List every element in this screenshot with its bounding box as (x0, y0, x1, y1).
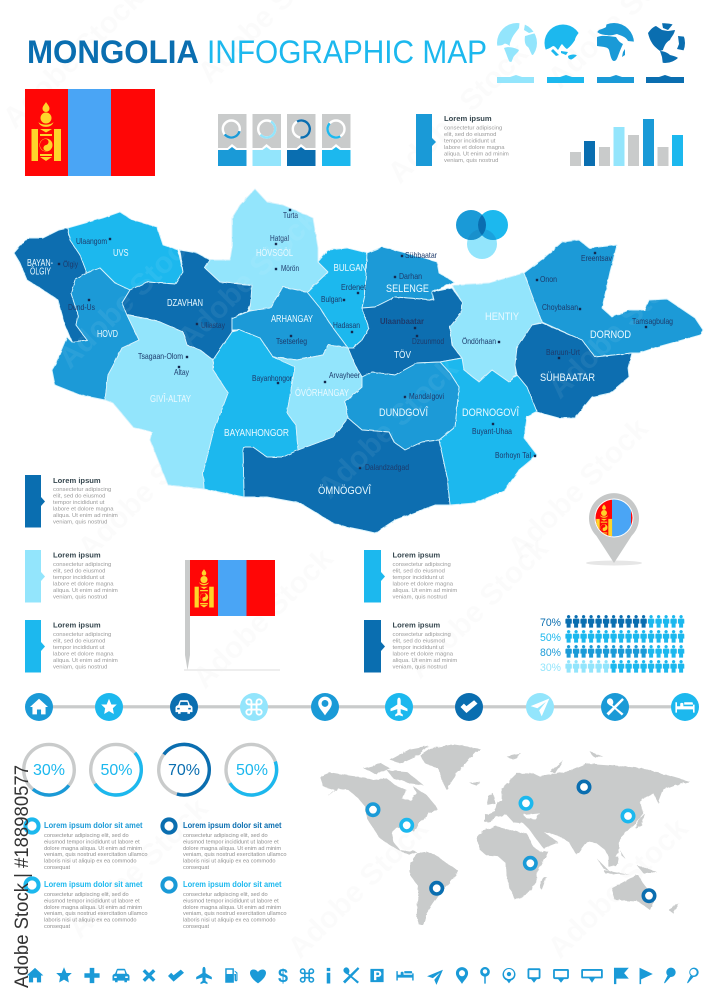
donut 50 percent (80, 734, 152, 805)
city labels: Ulaanbaatar (380, 316, 425, 326)
text block 2: veniam, quis nostrud exercitation ullamco (183, 852, 286, 858)
icon: map pin (311, 693, 339, 721)
region: Dundgovi (345, 362, 459, 450)
city labels: Tsagaan-Olom (138, 351, 183, 361)
globe: africa mid (597, 23, 634, 61)
city labels: Dund-Us (68, 302, 95, 312)
icon: command small (301, 969, 313, 982)
text block 1: dolore magna aliqua. Ut enim ad minim (44, 846, 142, 852)
icon: home outline (27, 968, 43, 982)
region: Suhbaatar (515, 323, 632, 418)
city labels: Buyant-Uhaa (472, 426, 512, 436)
legend block 2: labore et dolore magna (53, 582, 114, 588)
legend block 4: consectetur adipiscing (392, 562, 451, 568)
region labels: GIVÎ-ALTAY (150, 392, 191, 405)
legend block 2 (25, 550, 118, 602)
legend block 1: elit, sed do eiusmod (53, 494, 105, 500)
legend block 4: veniam, quis nostrud (392, 594, 447, 600)
legend block 4: elit, sed do eiusmod (392, 568, 445, 574)
region labels: BAYANHONGOR (224, 428, 289, 439)
city labels: Bayanhongor (252, 373, 292, 383)
text block 3: consectetur adipiscing elit, sed do (44, 892, 129, 898)
text block 2 (162, 819, 286, 871)
globe base bars (497, 75, 684, 83)
region: Arhangay (232, 287, 348, 360)
region: Dornod (524, 240, 703, 357)
legend block 1: aliqua. Ut enim ad minim (53, 513, 118, 519)
text block 4: Lorem ipsum dolor sit amet (183, 880, 282, 889)
legend block 5: aliqua. Ut enim ad minim (392, 658, 457, 664)
donut 50 percent second: 50% (236, 762, 268, 779)
city labels: Tsetserleg (276, 336, 307, 346)
bar chart (570, 119, 683, 166)
city labels: Tamsagbulag (632, 316, 673, 326)
top text block: veniam, quis nostrud (444, 158, 498, 164)
legend block 5: labore et dolore magna (392, 652, 454, 658)
vertical stock credit: Adobe Stock | #188980577 (12, 765, 33, 988)
text block 1: laboris nisi ut aliquip ex ea commodo (44, 858, 136, 864)
title: MONGOLIA (27, 34, 199, 70)
legend block 2: aliqua. Ut enim ad minim (53, 588, 118, 594)
location pin with flag (586, 493, 642, 566)
map markers (367, 781, 655, 901)
watermark over map (52, 202, 695, 505)
city labels: Hadasan (333, 320, 360, 330)
icon: home (25, 693, 53, 721)
icon: wide callout (553, 969, 569, 983)
region labels: ÖVÖRHANGAY (295, 387, 349, 399)
legend block 3 (25, 620, 118, 672)
top text block: labore et dolore magna (444, 145, 505, 151)
globe: asia bright (544, 24, 578, 60)
region: Hentiy (450, 273, 542, 382)
region: Bayanhongor (203, 330, 298, 497)
text block 4: veniam, quis nostrud exercitation ullamco (183, 911, 286, 917)
text block 3: veniam, quis nostrud exercitation ullamco (44, 911, 147, 917)
region: Hovd (52, 268, 139, 400)
text block 1: veniam, quis nostrud exercitation ullamco (44, 852, 147, 858)
city labels (63, 210, 673, 472)
text block 3: eiusmod tempor incididunt ut labore et (44, 898, 140, 904)
icon: fuel pump (225, 968, 237, 983)
icon: square callout (528, 968, 540, 983)
percentage labels: 30% (540, 662, 561, 674)
legend block 5: elit, sed do eiusmod (392, 638, 445, 644)
donut 50 percent: 50% (100, 762, 133, 779)
region labels: HÖVSGÖL (256, 247, 293, 259)
text block 4: consequat (183, 924, 209, 930)
title (27, 34, 487, 70)
watermark over map: Adobe Stock (172, 202, 325, 355)
icon: paper plane small (427, 970, 443, 985)
region: Tov (348, 288, 462, 377)
icon: car small (112, 969, 130, 982)
icon: pin (456, 967, 468, 984)
city labels: Mörön (281, 263, 299, 273)
legend block 3: Lorem ipsum (53, 620, 101, 630)
icon: flag (614, 968, 629, 984)
text block 2: consectetur adipiscing elit, sed do (183, 833, 268, 839)
text block 1 (25, 819, 147, 871)
legend block 5 (364, 620, 457, 672)
icon: command (240, 693, 268, 721)
percentage labels (540, 617, 561, 674)
text block 2: dolore magna aliqua. Ut enim ad minim (183, 846, 281, 852)
city labels: Baruun-Urt (546, 347, 581, 357)
text block 1: Lorem ipsum dolor sit amet (44, 821, 143, 830)
venn diagram (456, 210, 508, 259)
map of Mongolia (14, 189, 703, 533)
text block 4 (162, 878, 286, 930)
icon: star (95, 693, 123, 721)
icon: wider callout (581, 969, 603, 983)
legend block 4: labore et dolore magna (392, 582, 454, 588)
region labels: HOVD (97, 329, 118, 340)
people row 80 percent (565, 645, 684, 658)
icon: bed (671, 693, 699, 721)
legend block 2: veniam, quis nostrud (53, 594, 107, 600)
icon: info (327, 968, 330, 984)
card 3 (287, 114, 316, 166)
city dots (58, 209, 647, 469)
city labels: Ölgiy (63, 259, 79, 269)
icon: push pin (664, 968, 676, 983)
donut 70 percent: 70% (168, 762, 200, 779)
people row 70 percent (565, 615, 684, 628)
icon: magnifier pin (687, 968, 699, 983)
percentage labels: 70% (540, 617, 561, 629)
legend block 3: aliqua. Ut enim ad minim (53, 658, 118, 664)
world map (320, 744, 690, 925)
bottom icon row (27, 966, 699, 986)
legend block 3: veniam, quis nostrud (53, 664, 107, 670)
text block 2: laboris nisi ut aliquip ex ea commodo (183, 858, 276, 864)
city labels: Darhan (399, 271, 422, 281)
icon: pennant (640, 968, 653, 984)
icon: round pin (480, 967, 490, 984)
icon: check small (168, 970, 184, 982)
city labels: Bulgan (321, 294, 342, 304)
icon: star small (56, 967, 72, 982)
region labels: ÖMNÖGOVÎ (318, 484, 372, 497)
region labels: DORNOD (590, 329, 631, 341)
city labels: Dalandzadgad (365, 462, 409, 472)
top text block: aliqua. Ut enim ad minim (444, 152, 509, 158)
icon: parking (370, 969, 384, 982)
region labels: ÖLGIY (30, 266, 51, 278)
top text block: consectetur adipiscing (444, 126, 502, 132)
region: Bayan-Olgiy (14, 228, 87, 342)
text block 3: dolore magna aliqua. Ut enim ad minim (44, 905, 142, 911)
card 4 (322, 114, 350, 166)
donut 50 percent second (220, 738, 283, 801)
legend block 1: Lorem ipsum (53, 476, 101, 485)
flag on pole (184, 560, 280, 671)
globe: americas dark (648, 23, 687, 65)
legend block 3: elit, sed do eiusmod (53, 638, 105, 644)
legend block 5: veniam, quis nostrud (392, 664, 447, 670)
text block 1: consequat (44, 865, 70, 871)
donut 30 percent: 30% (33, 762, 65, 779)
city labels: Borhoyn Tal (495, 450, 531, 460)
legend block 4 (364, 550, 457, 602)
legend block 5: consectetur adipiscing (392, 632, 451, 638)
region labels: DZAVHAN (167, 298, 203, 309)
percentage labels: 50% (540, 632, 561, 644)
legend block 4: tempor incididunt ut (392, 575, 444, 581)
top text block: Lorem ipsum (444, 114, 492, 123)
donut charts (13, 734, 283, 805)
text block 3: Lorem ipsum dolor sit amet (44, 880, 143, 889)
text block 4: dolore magna aliqua. Ut enim ad minim (183, 905, 281, 911)
text block 3: consequat (44, 924, 70, 930)
percentage labels: 80% (540, 647, 561, 659)
flag of Mongolia (25, 89, 155, 176)
text block 4: eiusmod tempor incididunt ut labore et (183, 898, 279, 904)
region labels: BULGAN (334, 263, 366, 274)
legend block 5: Lorem ipsum (392, 620, 440, 630)
legend block 1: tempor incididunt ut (53, 500, 105, 506)
region labels: SÜHBAATAR (540, 372, 595, 384)
icon: bed small (396, 971, 414, 981)
city labels: Ulaangom (76, 236, 107, 246)
card 1 (218, 114, 246, 166)
globes row (497, 23, 685, 83)
region: Omnogovi (243, 418, 450, 533)
city labels: Uliastay (201, 320, 226, 330)
title: INFOGRAPHIC MAP (207, 34, 487, 70)
legend block 1: labore et dolore magna (53, 506, 114, 512)
region labels: ARHANGAY (271, 314, 313, 325)
legend block 4: Lorem ipsum (392, 550, 440, 560)
city labels: Mandalgovi (409, 391, 444, 401)
text block 2: Lorem ipsum dolor sit amet (183, 821, 282, 830)
watermark over map: Adobe Stock (52, 222, 205, 375)
region: Govi-Altay (105, 315, 228, 489)
region labels: BAYAN- (27, 258, 53, 269)
region: Dornogovi (439, 358, 537, 505)
text block 4: laboris nisi ut aliquip ex ea commodo (183, 918, 276, 924)
legend block 1: consectetur adipiscing (53, 487, 111, 493)
watermark over map: Adobe Stock (312, 352, 465, 505)
icon: fork knife small (343, 967, 359, 984)
map regions (14, 189, 703, 533)
region: Ovorhangay (273, 345, 362, 450)
people percentage chart (540, 615, 684, 674)
legend block 3: consectetur adipiscing (53, 632, 111, 638)
region: Bulgan (307, 248, 369, 348)
legend block 5: tempor incididunt ut (392, 645, 444, 651)
city labels: Onon (540, 274, 557, 284)
text block 1: consectetur adipiscing elit, sed do (44, 833, 129, 839)
region labels: TÖV (394, 349, 411, 361)
region labels: UVS (113, 248, 129, 259)
icon: check (455, 693, 483, 721)
city labels: Sühbaatar (405, 250, 437, 260)
icon: heart (250, 969, 266, 983)
legend block 2: Lorem ipsum (53, 550, 101, 560)
text block 4: consectetur adipiscing elit, sed do (183, 892, 268, 898)
city labels: Altay (174, 367, 190, 377)
region: Dzavhan (122, 250, 252, 360)
people row 50 percent (565, 630, 684, 643)
icon: cross (143, 969, 155, 982)
globe: americas light (497, 23, 537, 62)
city labels: Dzuunmod (412, 336, 444, 346)
people row 30 percent (565, 660, 684, 673)
top text block: tempor incididunt ut (444, 138, 496, 144)
donut 70 percent (148, 734, 220, 805)
top text block (416, 114, 509, 166)
region labels: SELENGE (386, 283, 429, 295)
text block 2: consequat (183, 865, 209, 871)
city labels: Turta (283, 210, 298, 220)
region: Hovsgol (205, 189, 328, 311)
region labels: DORNOGOVÎ (462, 406, 520, 419)
legend block 1 (25, 475, 118, 528)
city labels: Ereentsav (581, 253, 613, 263)
continents (320, 744, 690, 925)
text block 3 (25, 878, 147, 930)
legend block 3: tempor incididunt ut (53, 645, 105, 651)
top text block: elit, sed do eiusmod (444, 132, 496, 138)
icon: airplane (385, 693, 413, 721)
region labels: HENTIY (485, 311, 519, 323)
watermark over map: Adobe Stock (542, 252, 695, 405)
region labels (27, 247, 631, 497)
city labels: Choybalsan (542, 302, 578, 312)
legend block 2: consectetur adipiscing (53, 562, 111, 568)
city labels: Erdenet (341, 282, 367, 292)
donut 30 percent (13, 734, 85, 805)
city labels: Öndörhaan (462, 336, 496, 346)
text block 1: eiusmod tempor incididunt ut labore et (44, 840, 140, 846)
legend block 3: labore et dolore magna (53, 652, 114, 658)
city labels: Hatgal (270, 233, 289, 243)
legend block 1: veniam, quis nostrud (53, 520, 107, 526)
icon: fork and knife (601, 693, 629, 721)
text block 2: eiusmod tempor incididunt ut labore et (183, 840, 279, 846)
region labels: DUNDGOVÎ (379, 406, 429, 419)
legend block 2: elit, sed do eiusmod (53, 568, 105, 574)
icon: dollar: $ (278, 966, 288, 986)
icon: car (170, 693, 198, 721)
legend block 2: tempor incididunt ut (53, 575, 105, 581)
icon: paper plane (526, 693, 554, 721)
progress cards (218, 114, 350, 166)
icon timeline (25, 693, 699, 721)
icon: airplane small (196, 967, 212, 984)
region: Uvs (68, 212, 183, 290)
card 2 (252, 114, 281, 166)
text block 3: laboris nisi ut aliquip ex ea commodo (44, 918, 136, 924)
region: Selenge (362, 247, 454, 308)
legend block 4: aliqua. Ut enim ad minim (392, 588, 457, 594)
city labels: Arvayheer (329, 370, 360, 380)
icon: plus (84, 968, 100, 983)
icon: target pin (503, 968, 515, 983)
